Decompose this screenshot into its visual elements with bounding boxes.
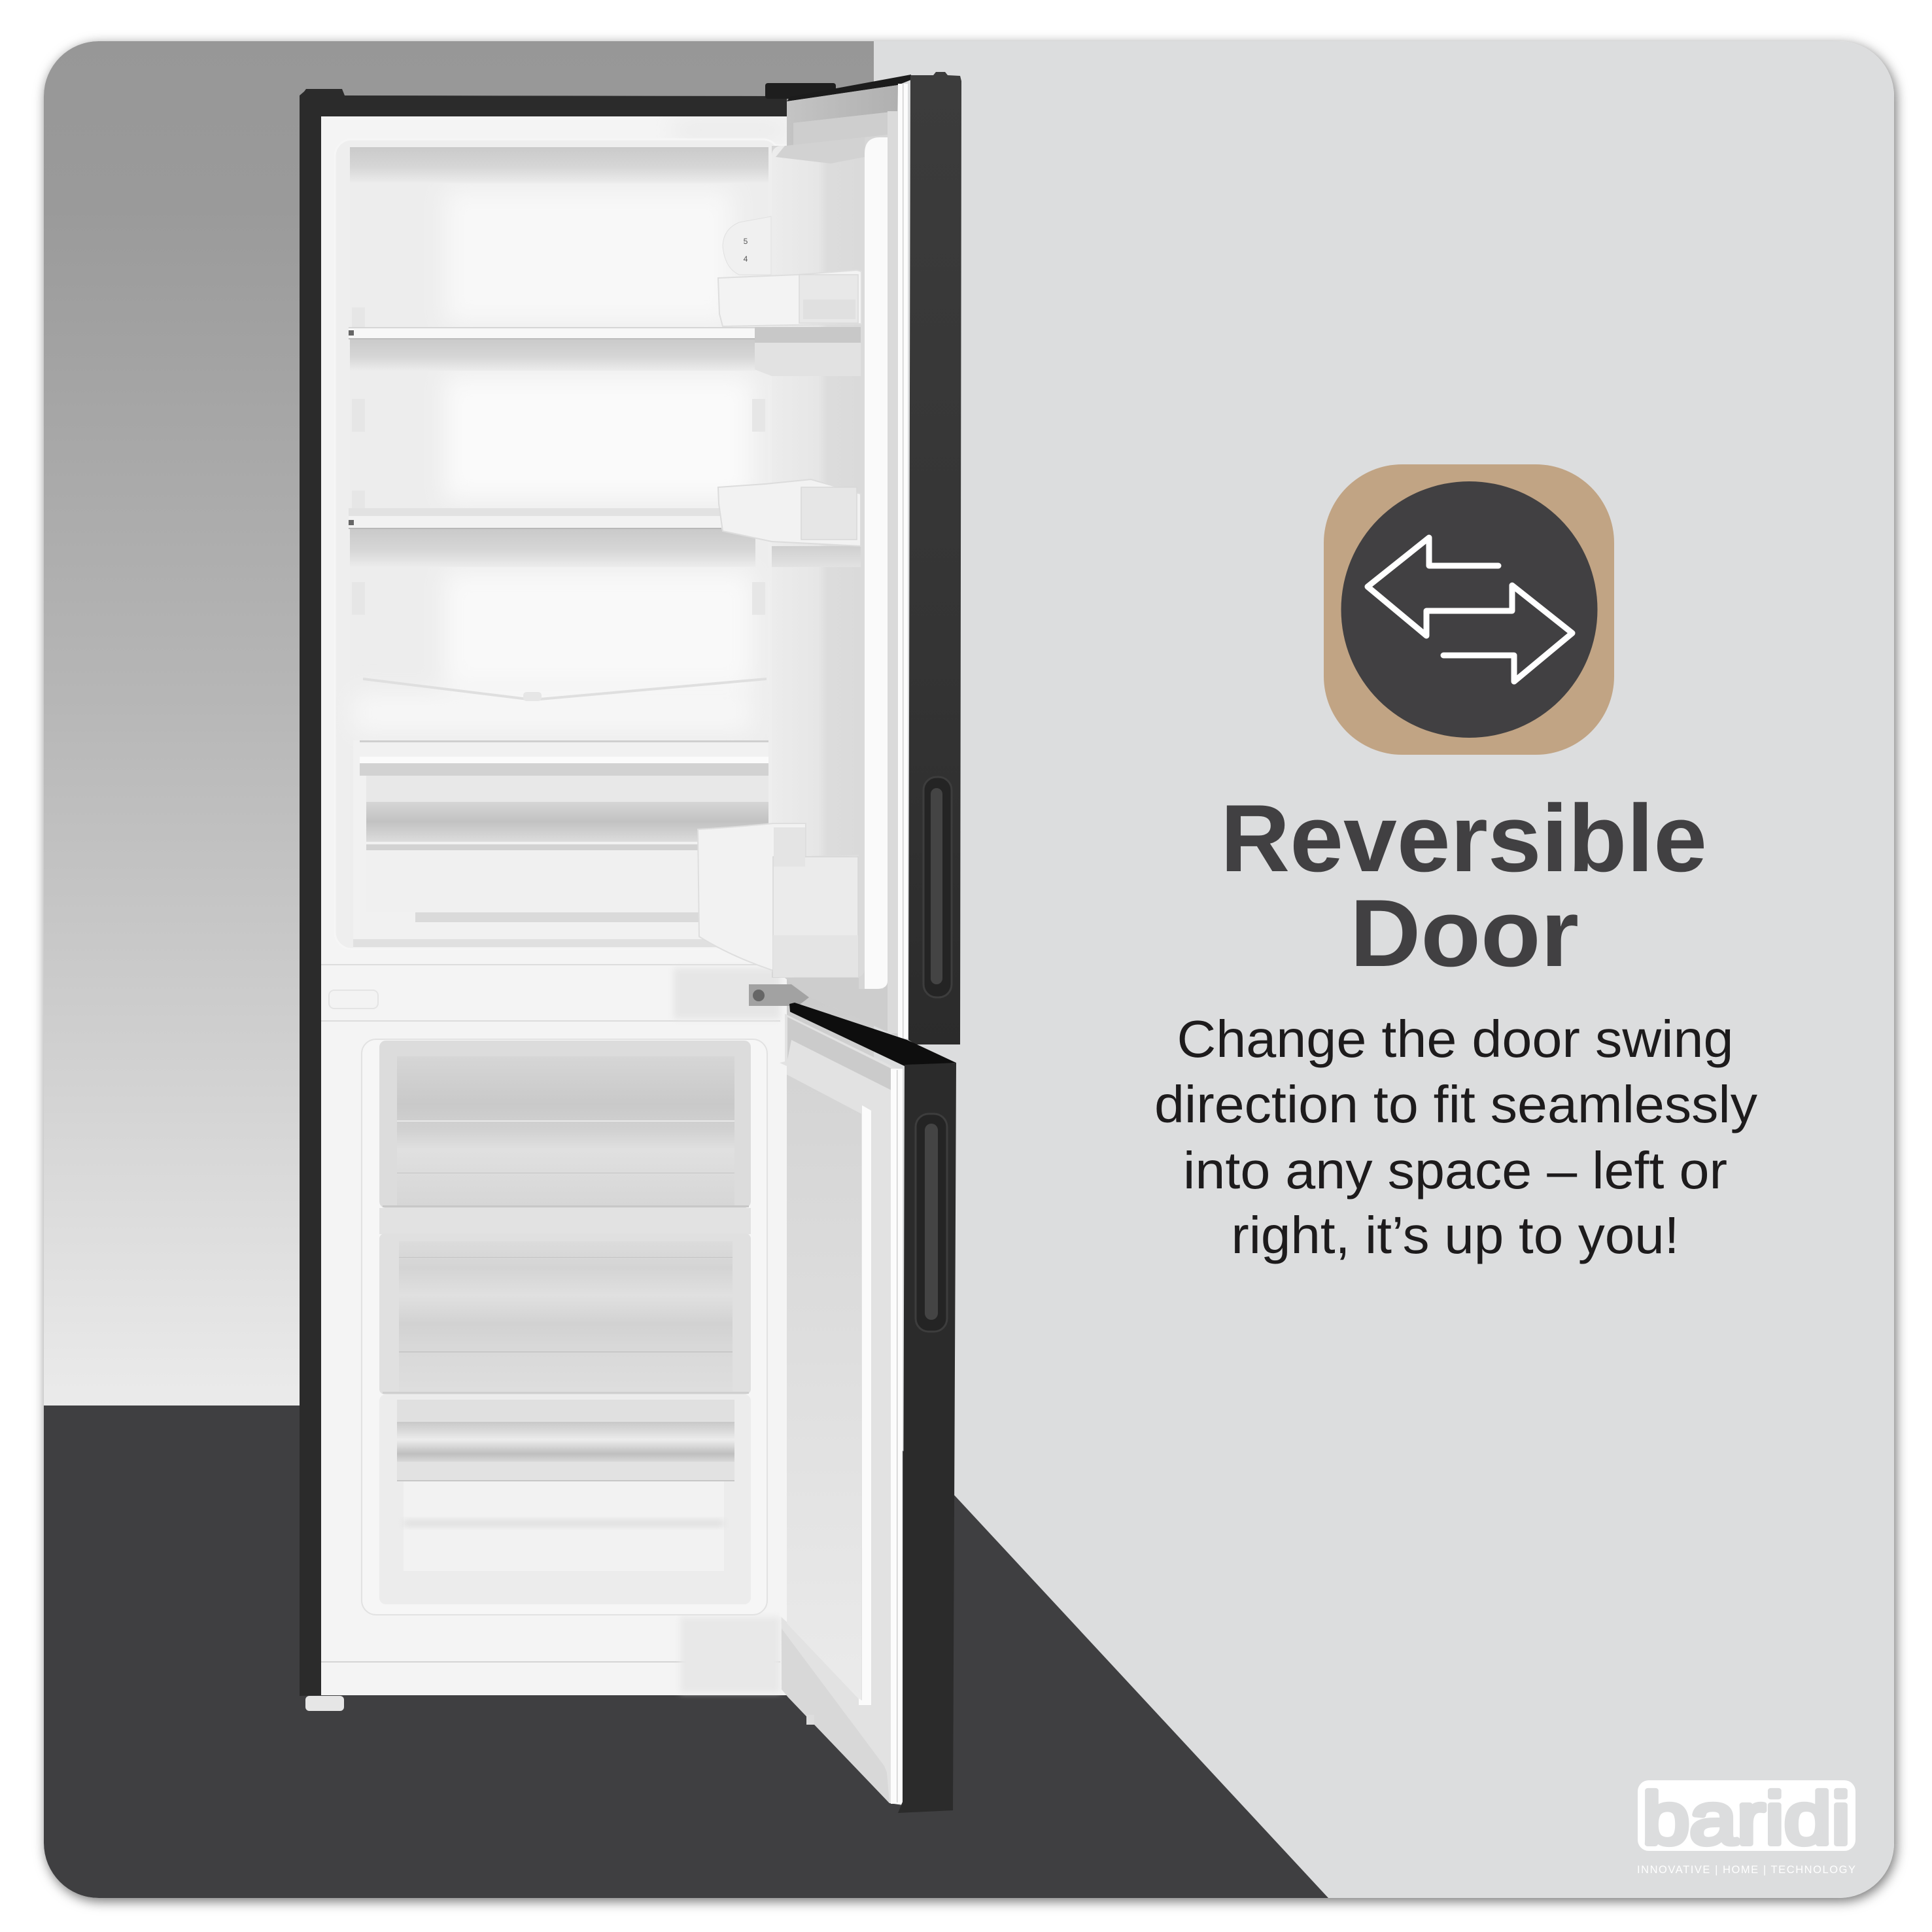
door gasket (865, 137, 888, 989)
top shadow (350, 147, 768, 183)
lower top band (787, 1017, 893, 1091)
upper handle (923, 777, 952, 997)
door inner panel (772, 146, 865, 978)
upper door outer panel (908, 72, 961, 1044)
back wall light patches (353, 190, 752, 733)
hinge top (765, 83, 836, 99)
door bin two (718, 479, 861, 546)
lower handle (916, 1114, 947, 1332)
glass shelf (363, 678, 767, 701)
top strip (789, 1003, 956, 1066)
lower door outer panel (898, 1063, 956, 1813)
door bin one (718, 270, 861, 326)
door liner lower (780, 1014, 903, 1805)
drawer three (379, 1394, 751, 1604)
heading (1220, 785, 1707, 986)
heading: Reversible (1220, 785, 1707, 891)
divider gap (379, 1208, 751, 1234)
fridge compartment (335, 139, 780, 949)
icon: reversible arrows (1324, 464, 1614, 755)
logo: INNOVATIVE | HOME | TECHNOLOGY (1637, 1864, 1855, 1876)
drawer two (379, 1233, 751, 1394)
body text: right, it’s up to you! (1231, 1206, 1680, 1264)
mid hinge (749, 984, 809, 1006)
right light panel (874, 41, 1894, 1898)
freezer compartment (362, 1039, 767, 1615)
heading: Door (1350, 880, 1579, 986)
door bin three (698, 823, 858, 977)
lower door (780, 1003, 956, 1805)
door frame (772, 85, 898, 1037)
shelf two shadow (350, 529, 755, 567)
thermostat dial: 4 (744, 254, 748, 264)
shelf one (349, 327, 767, 339)
lower left trim (780, 1063, 787, 1622)
door foot (806, 1715, 814, 1725)
lower inner panel (787, 1075, 861, 1702)
thermostat dial: 5 (744, 237, 748, 246)
cabinet body (300, 89, 787, 1696)
crisper drawer (353, 740, 768, 948)
body text: direction to fit seamlessly (1154, 1075, 1757, 1133)
upper door (755, 75, 911, 1039)
refrigerator (300, 72, 961, 1813)
foot (305, 1696, 344, 1711)
body text (1154, 1010, 1757, 1264)
silver door top (787, 85, 898, 148)
door ledge one (755, 331, 861, 376)
drawer one (379, 1041, 751, 1208)
silver door recess (793, 112, 893, 145)
thermostat dial (723, 216, 771, 275)
shelf supports (352, 307, 765, 615)
logo: baridi (1642, 1778, 1850, 1859)
lower bottom frame (782, 1629, 889, 1803)
floor (44, 1406, 1328, 1898)
shelf two (349, 508, 721, 529)
door top strip (787, 75, 911, 101)
wall panel (44, 41, 874, 1408)
lower gasket (859, 1105, 871, 1705)
door ledge two (772, 546, 861, 567)
body text: Change the door swing (1177, 1010, 1733, 1068)
body text: into any space – left or (1183, 1141, 1727, 1199)
shelf one shadow (350, 339, 755, 371)
logo (1637, 1778, 1855, 1876)
door lower wedge (785, 978, 898, 1037)
